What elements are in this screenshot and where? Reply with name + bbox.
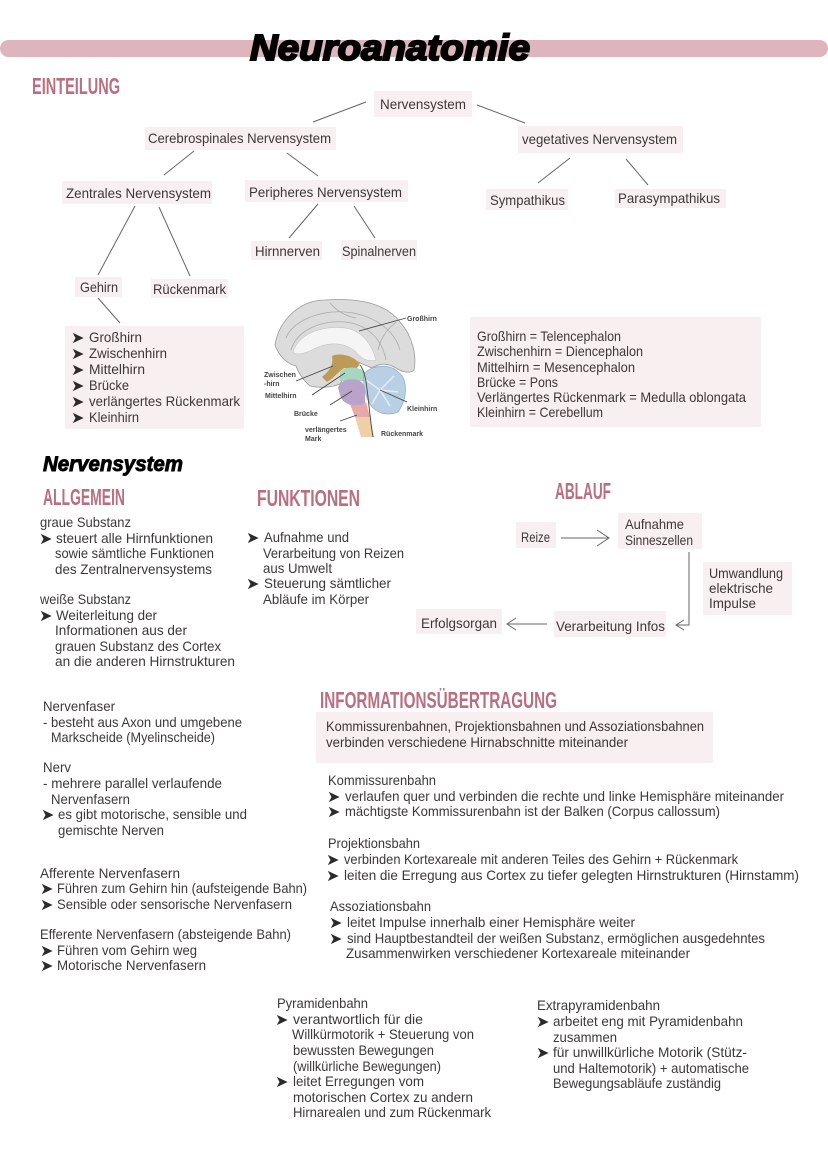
tree diagram: Einteilung: Peripheres Nervensystem xyxy=(249,184,402,200)
text block: Allgemein: grauen Substanz des Cortex xyxy=(55,638,221,654)
tree diagram: Einteilung xyxy=(62,91,726,323)
text block: Kommissurenbahn: mächtigste Kommissurenbahn ist der Balken (Corpus callossum) xyxy=(345,803,720,819)
panel: Latin terms xyxy=(470,317,761,427)
panel: Bahnen intro: Kommissurenbahnen, Projektionsbahnen und Assoziationsbahnen xyxy=(326,718,704,734)
text block: Funktionen: Aufnahme und xyxy=(264,529,349,545)
text block: Allgemein: Informationen aus der xyxy=(55,622,187,638)
text block: Kommissurenbahn xyxy=(327,772,784,821)
text block: Pyramidenbahn: ➤ xyxy=(275,1010,288,1029)
tree diagram: Einteilung: Gehirn xyxy=(80,279,118,295)
panel: Latin terms: Großhirn = Telencephalon xyxy=(477,328,621,344)
tree diagram: Einteilung: Cerebrospinales Nervensystem xyxy=(148,130,331,146)
title banner: Neuroanatomie xyxy=(250,27,530,68)
panel: Bahnen intro: verbinden verschiedene Hirnabschnitte miteinander xyxy=(326,734,628,750)
flow diagram: Ablauf xyxy=(416,513,792,637)
text block: Funktionen: ➤ xyxy=(246,528,259,547)
text block: Nervenfaser und Nerv: gemischte Nerven xyxy=(58,822,164,838)
text block: Assoziationsbahn: Zusammenwirken verschiedener Kortexareale miteinander xyxy=(346,945,690,961)
text block: Projektionsbahn: leiten die Erregung aus Cortex zu tiefer gelegten Hirnstrukturen (Hirnstamm) xyxy=(344,867,799,883)
panel: brain parts list: ➤ xyxy=(71,408,84,427)
panel: brain parts list: Mittelhirn xyxy=(89,361,145,377)
text block: Pyramidenbahn: verantwortlich für die xyxy=(293,1011,423,1027)
brain illustration: verlängertes xyxy=(305,427,347,434)
heading: Nervensystem: Nervensystem xyxy=(43,453,183,476)
text block: Assoziationsbahn: leitet Impulse innerhalb einer Hemisphäre weiter xyxy=(347,914,635,930)
flow diagram: Ablauf: Verarbeitung Infos xyxy=(556,618,665,634)
text block: Extrapyramidenbahn: für unwillkürliche Motorik (Stütz- xyxy=(553,1044,747,1060)
text block: Assoziationsbahn: sind Hauptbestandteil der weißen Substanz, ermöglichen ausgedehntes xyxy=(347,930,765,946)
text block: Projektionsbahn xyxy=(326,835,799,885)
tree diagram: Einteilung: Sympathikus xyxy=(490,192,565,208)
brain illustration: Brücke xyxy=(294,411,318,418)
text block: Extrapyramidenbahn: arbeitet eng mit Pyramidenbahn xyxy=(553,1013,743,1029)
text block: Assoziationsbahn: Assoziationsbahn xyxy=(330,898,431,914)
panel: brain parts list: verlängertes Rückenmark xyxy=(89,393,241,409)
brain illustration: Mark xyxy=(305,436,321,443)
text block: Nervenfaser und Nerv: - besteht aus Axon und umgebene xyxy=(43,714,242,730)
text block: Assoziationsbahn: ➤ xyxy=(329,929,342,948)
flow diagram: Ablauf: Reize xyxy=(521,529,550,545)
heading: Informationsübertragung: INFORMATIONSÜBERTRAGUNG xyxy=(320,687,557,713)
text block: Pyramidenbahn xyxy=(275,995,492,1120)
panel: brain parts list xyxy=(65,326,244,429)
text block: Kommissurenbahn: verlaufen quer und verbinden die rechte und linke Hemisphäre miteinander xyxy=(345,788,784,804)
text block: Kommissurenbahn: Kommissurenbahn xyxy=(328,772,436,788)
flow diagram: Ablauf: Aufnahme xyxy=(625,516,684,532)
text block: Pyramidenbahn: (willkürliche Bewegungen) xyxy=(293,1058,441,1074)
text block: Funktionen: Verarbeitung von Reizen xyxy=(263,545,404,561)
text block: Pyramidenbahn: Pyramidenbahn xyxy=(277,995,368,1011)
text block: Afferente und efferente Nervenfasern xyxy=(40,865,307,975)
text block: Assoziationsbahn xyxy=(329,898,765,961)
text block: Allgemein: Weiterleitung der xyxy=(56,607,157,623)
text block: Extrapyramidenbahn xyxy=(536,997,749,1091)
text block: Afferente und efferente Nervenfasern: ➤ xyxy=(40,895,53,914)
text block: Nervenfaser und Nerv: Nerv xyxy=(43,759,71,775)
panel: brain parts list: Zwischenhirn xyxy=(89,345,167,361)
text block: Afferente und efferente Nervenfasern: Führen zum Gehirn hin (aufsteigende Bahn) xyxy=(57,880,307,896)
panel: Latin terms: Verlängertes Rückenmark = Medulla oblongata xyxy=(477,389,746,405)
text block: Allgemein xyxy=(39,514,235,669)
text block: Afferente und efferente Nervenfasern: Führen vom Gehirn weg xyxy=(57,942,197,958)
panel: brain parts list: Kleinhirn xyxy=(89,409,139,425)
text block: Projektionsbahn: Projektionsbahn xyxy=(328,835,420,851)
text block: Allgemein: graue Substanz xyxy=(40,514,131,530)
text block: Allgemein: weiße Substanz xyxy=(39,591,131,607)
text block: Extrapyramidenbahn: Extrapyramidenbahn xyxy=(537,997,660,1013)
text block: Pyramidenbahn: Hirnarealen und zum Rückenmark xyxy=(293,1104,492,1120)
text block: Afferente und efferente Nervenfasern: Afferente Nervenfasern xyxy=(40,865,180,881)
text block: Allgemein: ➤ xyxy=(39,529,52,548)
text block: Nervenfaser und Nerv: Nervenfaser xyxy=(43,698,115,714)
tree diagram: Einteilung: Parasympathikus xyxy=(618,190,720,206)
text block: Funktionen: aus Umwelt xyxy=(263,560,332,576)
text block: Afferente und efferente Nervenfasern: Motorische Nervenfasern xyxy=(57,957,206,973)
panel: brain parts list: ➤ xyxy=(71,344,84,363)
text block: Allgemein: des Zentralnervensystems xyxy=(55,561,212,577)
heading: Allgemein: ALLGEMEIN xyxy=(43,484,125,510)
brain illustration xyxy=(264,300,437,443)
panel: brain parts list: ➤ xyxy=(71,328,84,347)
flow diagram: Ablauf: Umwandlung xyxy=(709,565,783,581)
panel: brain parts list: ➤ xyxy=(71,392,84,411)
panel: brain parts list: Brücke xyxy=(89,377,129,393)
text block: Pyramidenbahn: bewussten Bewegungen xyxy=(293,1042,434,1058)
text block: Allgemein: steuert alle Hirnfunktionen xyxy=(56,530,213,546)
panel: Bahnen intro xyxy=(316,712,713,763)
heading: Funktionen: FUNKTIONEN xyxy=(257,485,360,511)
text block: Projektionsbahn: ➤ xyxy=(326,850,339,869)
text block: Allgemein: sowie sämtliche Funktionen xyxy=(55,545,214,561)
text block: Nervenfaser und Nerv: Markscheide (Myelinscheide) xyxy=(51,729,215,745)
text block: Pyramidenbahn: ➤ xyxy=(275,1072,288,1091)
brain illustration: Großhirn xyxy=(407,316,437,323)
flow diagram: Ablauf: Impulse xyxy=(709,595,756,611)
text block: Nervenfaser und Nerv: ➤ xyxy=(41,805,54,824)
text block: Extrapyramidenbahn: zusammen xyxy=(553,1029,617,1045)
text block: Nervenfaser und Nerv: - mehrere parallel verlaufende xyxy=(43,775,222,791)
text block: Afferente und efferente Nervenfasern: ➤ xyxy=(40,879,53,898)
panel: Latin terms: Kleinhirn = Cerebellum xyxy=(477,404,603,420)
panel: brain parts list: Großhirn xyxy=(89,329,142,345)
text block: Pyramidenbahn: Willkürmotorik + Steuerung von xyxy=(292,1026,474,1042)
brain illustration: Rückenmark xyxy=(381,431,423,438)
panel: Latin terms: Mittelhirn = Mesencephalon xyxy=(477,359,635,375)
tree diagram: Einteilung: Rückenmark xyxy=(153,281,227,297)
text block: Pyramidenbahn: leitet Erregungen vom xyxy=(293,1073,424,1089)
tree diagram: Einteilung: Spinalnerven xyxy=(342,243,416,259)
text block: Afferente und efferente Nervenfasern: Efferente Nervenfasern (absteigende Bahn) xyxy=(40,926,291,942)
text block: Nervenfaser und Nerv xyxy=(41,698,247,838)
tree diagram: Einteilung: Zentrales Nervensystem xyxy=(66,185,211,201)
text block: Funktionen: Steuerung sämtlicher xyxy=(264,575,391,591)
panel: Latin terms: Brücke = Pons xyxy=(477,374,558,390)
text block: Allgemein: an die anderen Hirnstrukturen xyxy=(55,653,235,669)
panel: brain parts list: ➤ xyxy=(71,360,84,379)
text block: Extrapyramidenbahn: Bewegungsabläufe zuständig xyxy=(553,1075,721,1091)
text block: Extrapyramidenbahn: ➤ xyxy=(536,1043,549,1062)
text block: Funktionen xyxy=(246,528,404,607)
brain illustration: Kleinhirn xyxy=(407,406,437,413)
text block: Afferente und efferente Nervenfasern: Sensible oder sensorische Nervenfasern xyxy=(57,896,292,912)
heading: Einteilung: EINTEILUNG xyxy=(32,73,120,99)
text block: Projektionsbahn: ➤ xyxy=(326,866,339,885)
text block: Extrapyramidenbahn: und Haltemotorik) + automatische xyxy=(553,1060,749,1076)
text block: Assoziationsbahn: ➤ xyxy=(329,913,342,932)
text block: Funktionen: ➤ xyxy=(246,574,259,593)
brain illustration: Mittelhirn xyxy=(265,393,296,400)
flow diagram: Ablauf: Erfolgsorgan xyxy=(421,615,497,631)
tree diagram: Einteilung: Hirnnerven xyxy=(255,243,320,259)
flow diagram: Ablauf: elektrische xyxy=(709,580,773,596)
text block: Afferente und efferente Nervenfasern: ➤ xyxy=(40,941,53,960)
title banner xyxy=(0,27,828,68)
panel: Latin terms: Zwischenhirn = Diencephalon xyxy=(477,343,643,359)
text block: Afferente und efferente Nervenfasern: ➤ xyxy=(40,956,53,975)
text block: Pyramidenbahn: motorischen Cortex zu andern xyxy=(293,1089,473,1105)
tree diagram: Einteilung: vegetatives Nervensystem xyxy=(522,131,677,147)
panel: brain parts list: ➤ xyxy=(71,376,84,395)
heading: Ablauf: ABLAUF xyxy=(555,478,611,504)
text block: Nervenfaser und Nerv: es gibt motorische, sensible und xyxy=(58,806,247,822)
brain illustration: -hirn xyxy=(264,381,280,388)
text block: Projektionsbahn: verbinden Kortexareale mit anderen Teiles des Gehirn + Rückenmark xyxy=(344,851,739,867)
flow diagram: Ablauf: Sinneszellen xyxy=(625,532,693,548)
tree diagram: Einteilung: Nervensystem xyxy=(380,96,466,112)
text block: Nervenfaser und Nerv: Nervenfasern xyxy=(51,791,130,807)
text block: Kommissurenbahn: ➤ xyxy=(327,802,340,821)
text block: Extrapyramidenbahn: ➤ xyxy=(536,1012,549,1031)
brain illustration: Zwischen xyxy=(264,372,296,379)
text block: Funktionen: Abläufe im Körper xyxy=(263,591,369,607)
text block: Kommissurenbahn: ➤ xyxy=(327,787,340,806)
text block: Allgemein: ➤ xyxy=(39,606,52,625)
